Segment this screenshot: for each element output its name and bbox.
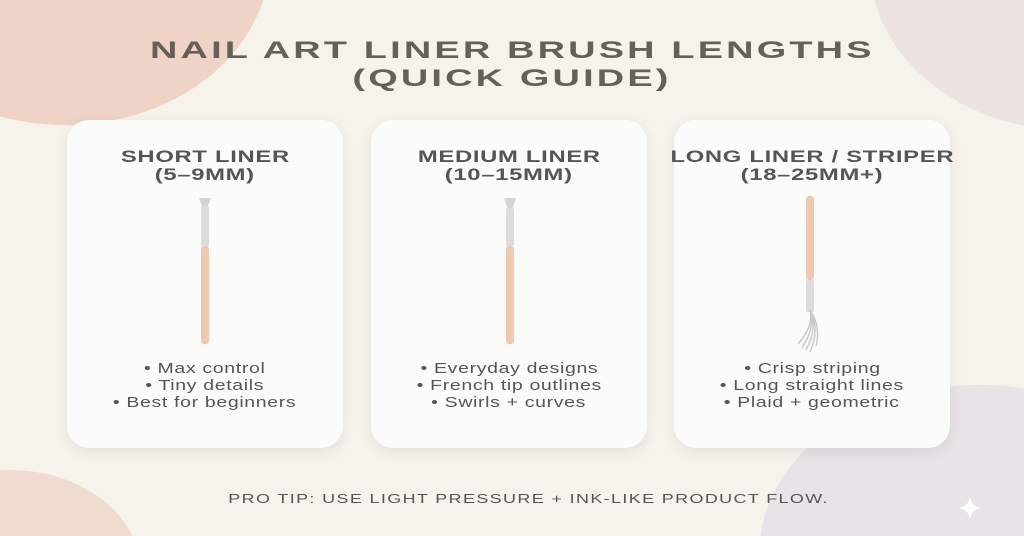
icon: medium brush [504, 198, 516, 344]
bullets: medium: • Everyday designs [420, 360, 598, 377]
heading: medium [418, 147, 600, 184]
bullets: medium: • Swirls + curves [432, 394, 586, 411]
pro tip: PRO TIP: USE LIGHT PRESSURE + INK-LIKE PRODUCT FLOW. [229, 491, 829, 506]
bullets: medium [416, 360, 602, 411]
bullets: long: • Crisp striping [744, 360, 880, 377]
heading: short [120, 147, 290, 184]
title: NAIL ART LINER BRUSH LENGTHS [150, 37, 874, 64]
bullets: long: • Plaid + geometric [724, 394, 900, 411]
icon: long brush [798, 196, 818, 352]
background circle top-left [0, 0, 270, 125]
background circle bottom-right [760, 385, 1024, 536]
heading: long: LONG LINER / STRIPER [670, 147, 954, 166]
panel: long liner [674, 120, 950, 448]
heading: medium: (10–15MM) [445, 165, 573, 184]
panel: short liner [67, 120, 343, 448]
bullets: long [720, 360, 904, 411]
icon: short brush [199, 198, 211, 344]
background circle bottom-left [0, 470, 140, 536]
title [150, 37, 874, 92]
heading: long: (18–25MM+) [741, 165, 883, 184]
icon: sparkle [959, 497, 981, 519]
bullets: long: • Long straight lines [720, 377, 904, 394]
bullets: short: • Best for beginners [113, 394, 297, 411]
heading: long [670, 147, 954, 184]
bullets: medium: • French tip outlines [416, 377, 602, 394]
title: (QUICK GUIDE) [352, 65, 672, 92]
heading: short: (5–9MM) [155, 165, 255, 184]
bullets: short: • Tiny details [146, 377, 264, 394]
bullets: short [113, 360, 297, 411]
background circle top-right [870, 0, 1024, 130]
heading: medium: MEDIUM LINER [418, 147, 600, 166]
bullets: short: • Max control [144, 360, 266, 377]
heading: short: SHORT LINER [120, 147, 290, 166]
panel: medium liner [371, 120, 647, 448]
